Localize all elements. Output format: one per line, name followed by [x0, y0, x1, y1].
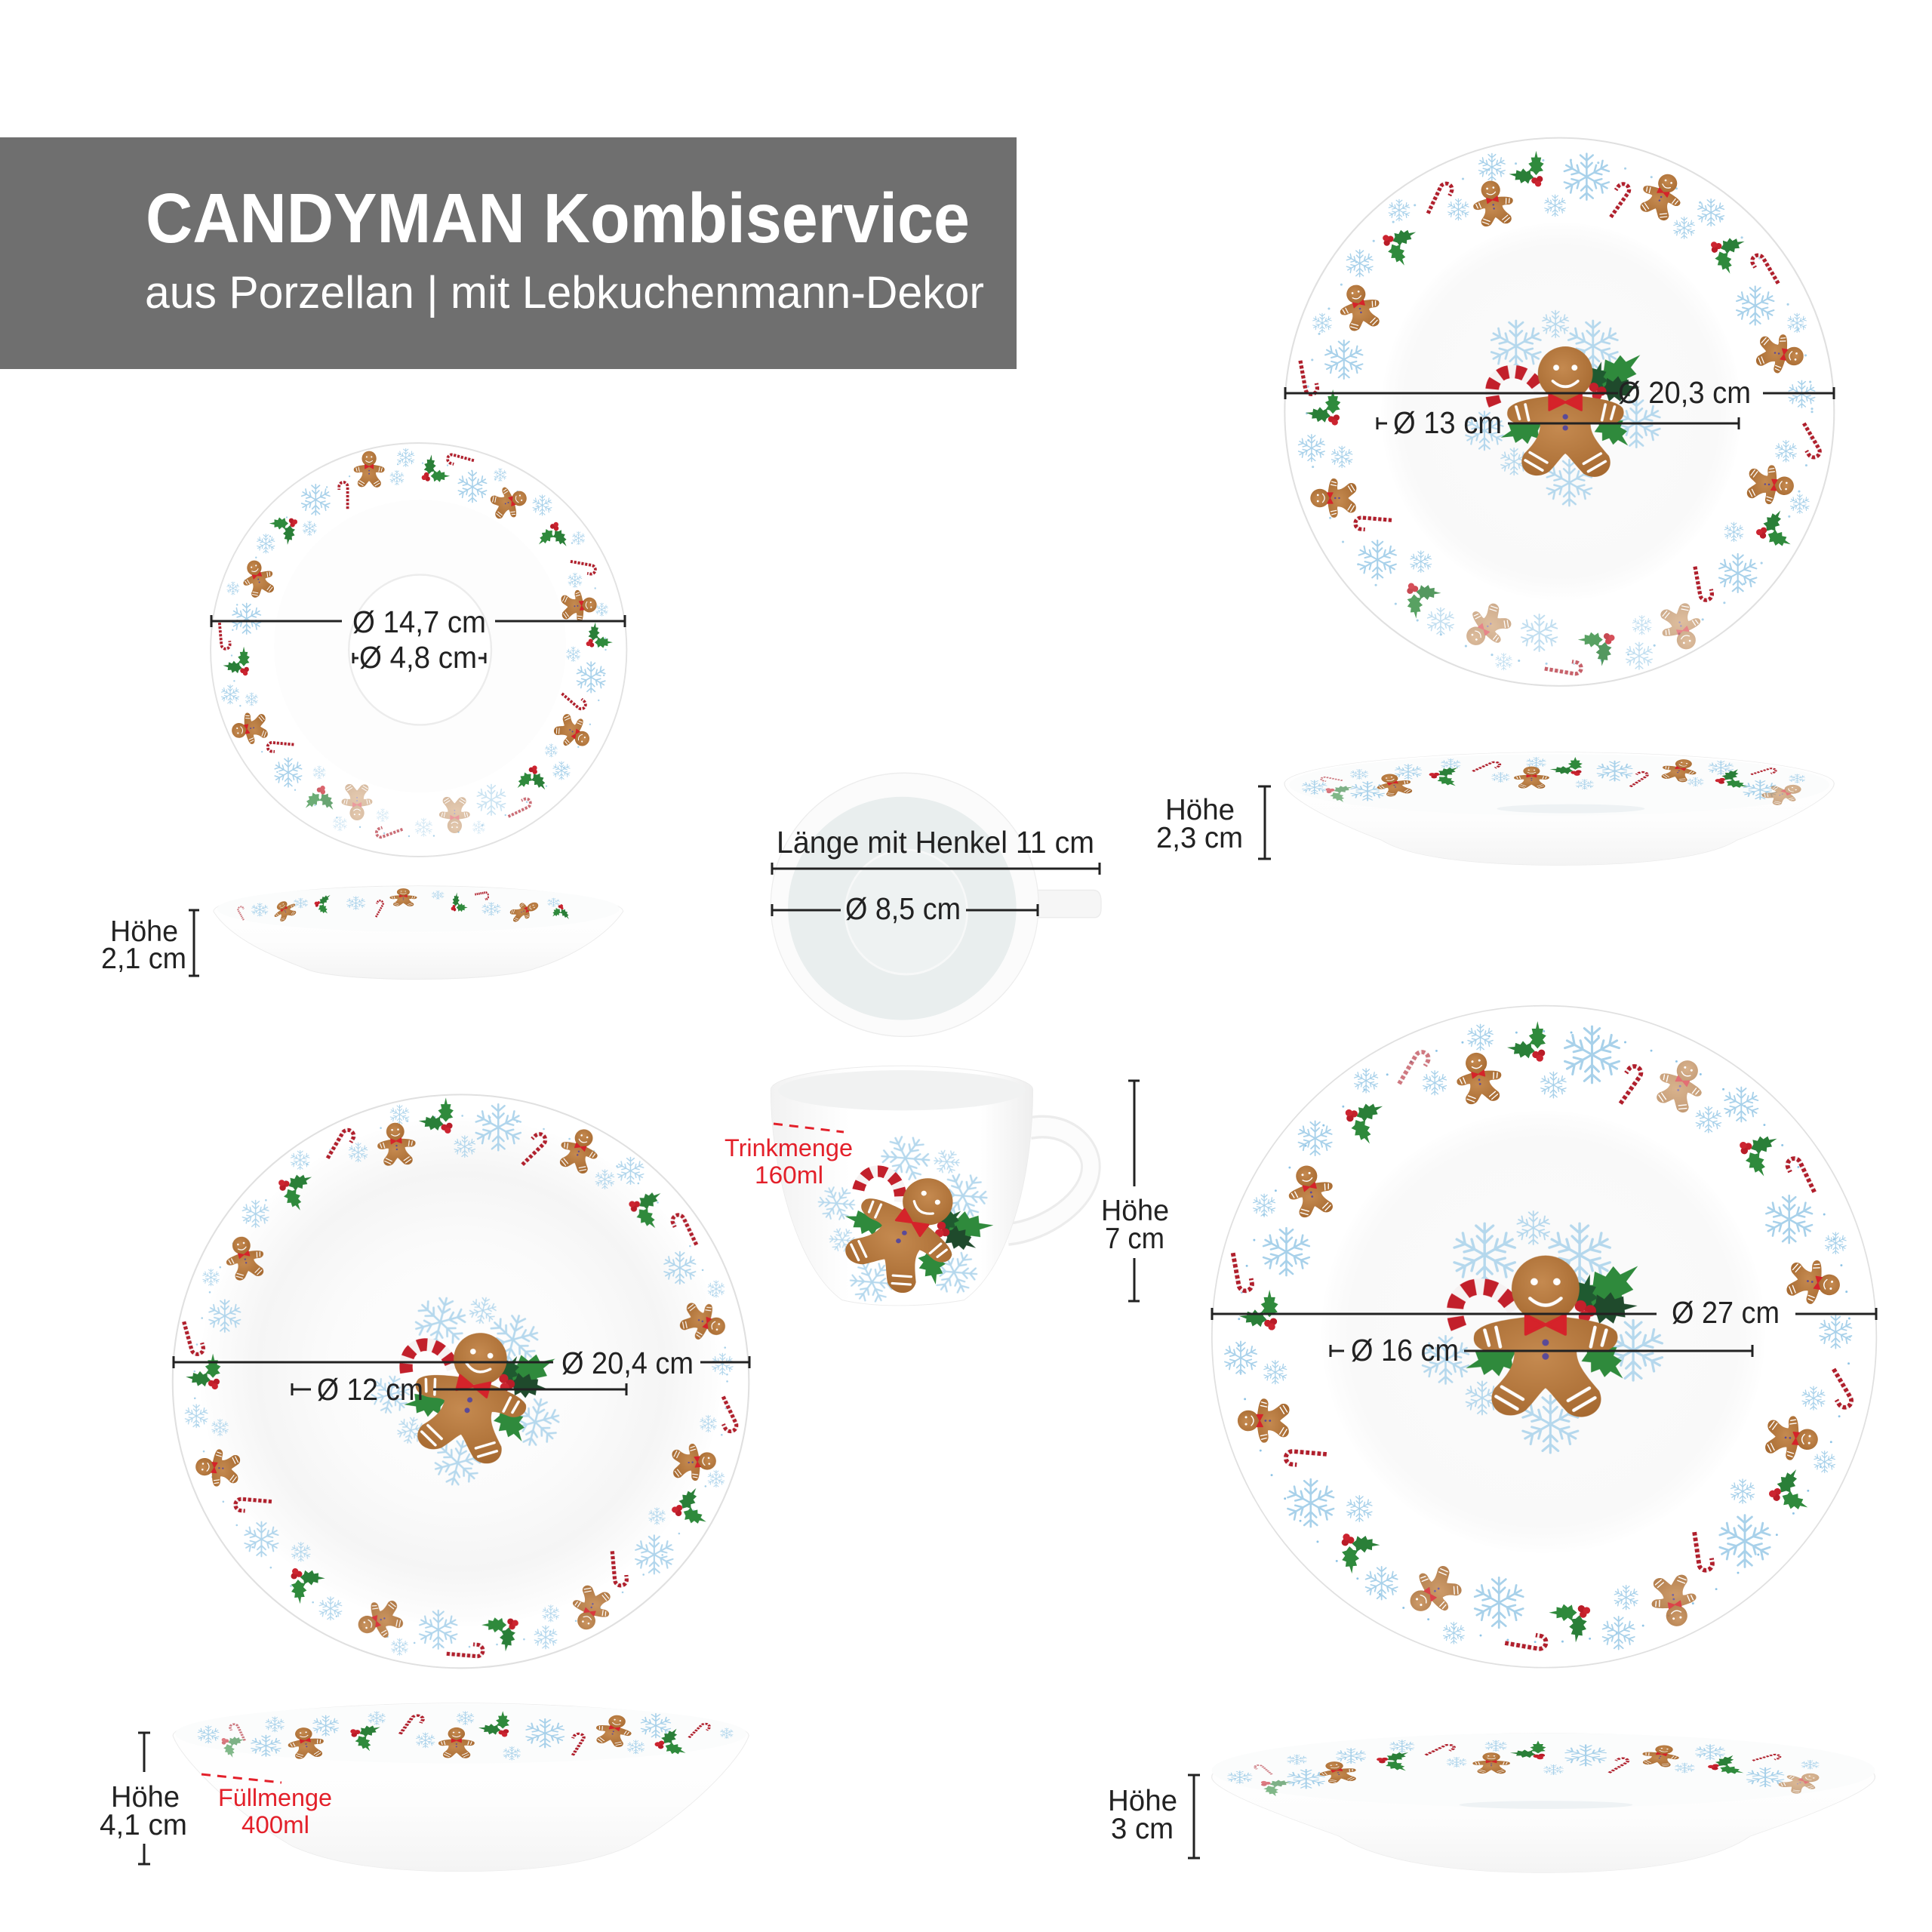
callout: cup drinking volume: Trinkmenge: [724, 1134, 853, 1161]
decor ring: snowflakes: [221, 448, 608, 836]
dimension: bowl Ø 12 cm: Ø 12 cm: [317, 1372, 423, 1407]
panel: cup top view: [771, 773, 1101, 1036]
decor ring: snowflakes: [184, 1104, 734, 1655]
dimension: saucer height: 2,1 cm: [101, 943, 186, 975]
dimension: large plate height: [1108, 1775, 1200, 1858]
dimension: plate height: 2,3 cm: [1156, 822, 1243, 854]
dimension: cup height: [1101, 1081, 1169, 1301]
dimension: large plate height: Höhe: [1108, 1785, 1177, 1817]
dimension: cup length with handle: Länge mit Henkel 11 cm: [777, 825, 1094, 860]
cup motif: gingerbread man: [782, 1108, 1033, 1343]
panel: deep bowl side view: [173, 1703, 749, 1872]
dimension: bowl height: 4,1 cm: [100, 1809, 187, 1841]
dimension: plate Ø 13 cm: Ø 13 cm: [1393, 405, 1502, 440]
centre motif: gingerbread man: [354, 1277, 586, 1506]
decor ring: candy canes: [1233, 1050, 1854, 1650]
dimension: cup Ø 8,5 cm: Ø 8,5 cm: [845, 891, 961, 926]
panel: dinner plate side view: [1284, 752, 1834, 865]
dimension: cup height: Höhe: [1101, 1195, 1169, 1227]
decor ring: candy canes: [1300, 182, 1822, 675]
dimension: large plate Ø 27 cm: Ø 27 cm: [1672, 1295, 1780, 1330]
dimension: large plate Ø 16 cm: Ø 16 cm: [1351, 1333, 1459, 1367]
panel: saucer top view: [211, 443, 626, 857]
callout: cup drinking volume: 160ml: [755, 1161, 823, 1189]
dimension: plate Ø 20,3 cm: Ø 20,3 cm: [1618, 375, 1751, 410]
decor ring: gingerbread men: [1238, 1049, 1844, 1630]
panel: deep bowl top view: [173, 1094, 749, 1668]
dimension: saucer height: Höhe: [110, 915, 178, 948]
decor ring: holly: [1305, 151, 1802, 667]
callout: bowl fill volume: 400ml: [242, 1811, 309, 1838]
dimension: saucer Ø 14,7 cm: Ø 14,7 cm: [352, 605, 486, 639]
panel: dinner plate 20,3 cm top view: [1284, 138, 1834, 686]
centre motif: gingerbread man: [1465, 311, 1661, 506]
callout: bowl fill volume: [202, 1774, 332, 1838]
callout: cup drinking volume: [724, 1124, 853, 1189]
dimension: saucer Ø 14,7 cm: [211, 605, 625, 639]
decor ring: holly: [1238, 1021, 1821, 1644]
decor ring: candy canes: [220, 454, 596, 838]
dimension: cup Ø 8,5 cm: [772, 891, 1038, 926]
decor ring: gingerbread men: [194, 1121, 731, 1645]
decor ring: holly: [185, 1097, 718, 1653]
dimension: cup height: 7 cm: [1105, 1223, 1164, 1255]
decor ring: holly: [222, 454, 613, 823]
decor ring: candy canes: [184, 1128, 738, 1657]
callout: bowl fill volume: Füllmenge: [218, 1784, 332, 1811]
dimension: large plate Ø 16 cm: [1331, 1333, 1752, 1367]
dimension: bowl height: Höhe: [111, 1781, 180, 1814]
dimension: cup length with handle: [772, 825, 1100, 875]
panel: saucer side view: [214, 886, 623, 980]
dimension: bowl Ø 20,4 cm: Ø 20,4 cm: [561, 1346, 694, 1380]
dimension: bowl Ø 20,4 cm: [174, 1346, 749, 1380]
subtitle: aus Porzellan | mit Lebkuchenmann-Dekor: [145, 267, 984, 318]
dimension: large plate height: 3 cm: [1111, 1813, 1174, 1845]
dimension: bowl height: [100, 1733, 187, 1864]
dimension: plate height: [1156, 786, 1271, 859]
decor ring: snowflakes: [1298, 153, 1816, 670]
title: CANDYMAN Kombiservice: [146, 179, 970, 257]
panel: title banner: [0, 137, 1017, 369]
dimension: saucer height: [101, 910, 199, 976]
dimension: bowl Ø 12 cm: [292, 1372, 626, 1407]
decor ring: gingerbread men: [229, 451, 598, 833]
dimension: saucer Ø 4,8 cm: Ø 4,8 cm: [359, 640, 477, 675]
dimension: plate Ø 13 cm: [1377, 405, 1739, 440]
decor ring: snowflakes: [1224, 1024, 1853, 1650]
dimension: plate Ø 20,3 cm: [1285, 375, 1834, 410]
panel: cup side view: [771, 1066, 1091, 1343]
decor ring: gingerbread men: [1310, 167, 1807, 657]
centre motif: gingerbread man: [1421, 1211, 1664, 1453]
panel: soup-plate 27 cm top view: [1212, 1006, 1876, 1668]
panel: soup-plate side view: [1212, 1734, 1875, 1872]
dimension: plate height: Höhe: [1165, 794, 1235, 826]
dimension: large plate Ø 27 cm: [1212, 1295, 1876, 1330]
